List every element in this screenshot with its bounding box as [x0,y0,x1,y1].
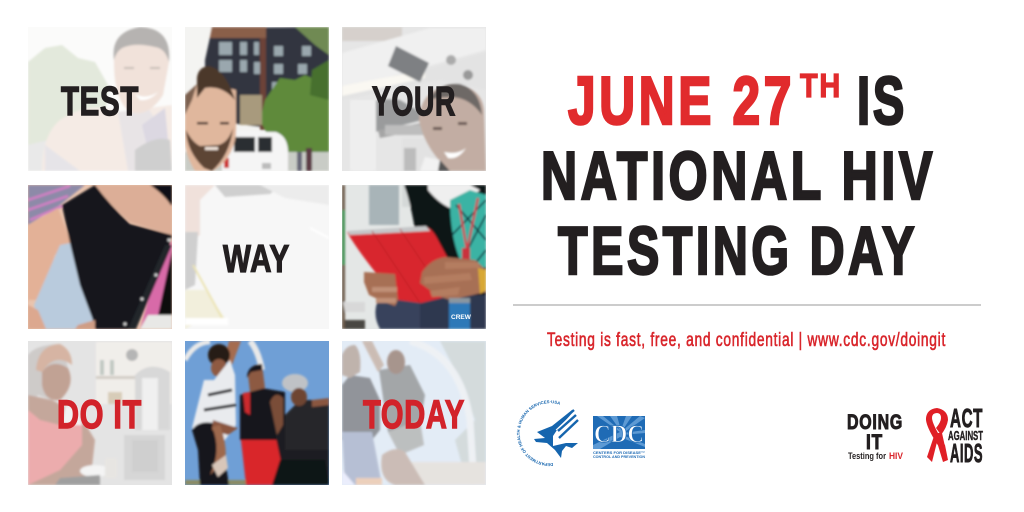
logo: Act Against AIDS with ribbon [926,403,983,468]
title line 1: JUNE 27 [568,63,795,139]
logo: Doing It Testing for HIV: HIV [889,451,904,462]
panel: photo tile, TEST [28,27,172,171]
panel: photo tile, three jumping men [185,341,329,485]
logo: Doing It Testing for HIV: IT [866,431,883,454]
panel: photo tile, black shirt and denim [28,185,172,329]
heading word: YOUR: YOUR [372,78,456,124]
heading word: TODAY: TODAY [363,393,465,437]
CDC name: CENTERS FOR DISEASE™ [593,451,645,455]
heading word: DO IT: DO IT [57,393,142,437]
logo: Doing It Testing for HIV [847,411,904,462]
heading word: TEST: TEST [61,78,139,124]
panel: photo tile, TODAY [342,341,486,485]
panel: photo tile, DO IT [28,341,172,485]
logo: Act Against AIDS with ribbon: AIDS [950,438,983,468]
logo: Act Against AIDS with ribbon: ACT [950,403,983,433]
title line 1: IS [857,63,907,139]
logo: Doing It Testing for HIV: Testing for [848,451,886,462]
logo: Act Against AIDS with ribbon: AGAINST [948,429,983,443]
logo: HHS eagle seal: DEPARTMENT OF HEALTH & HUMAN SERVICES·USA [516,400,560,466]
panel: photo tile, WAY [185,185,329,329]
logo: Doing It Testing for HIV: DOING [847,411,903,434]
logo: CDC: CONTROL AND PREVENTION [593,455,645,459]
logo: HHS eagle seal [516,400,579,466]
panel: photo tile, YOUR [342,27,486,171]
panel: photo tile, red tablet [342,185,486,329]
panel: photo tile, man with mohawk and van [185,27,329,171]
heading word: WAY: WAY [223,238,290,281]
logo: CDC [593,416,645,459]
title line 1: TH [800,67,842,104]
logo: CDC: CDC [594,421,644,448]
title: June 27th is National HIV Testing Day [541,63,936,289]
icon: red ribbon [926,408,948,462]
badge text: CREW [451,314,472,321]
